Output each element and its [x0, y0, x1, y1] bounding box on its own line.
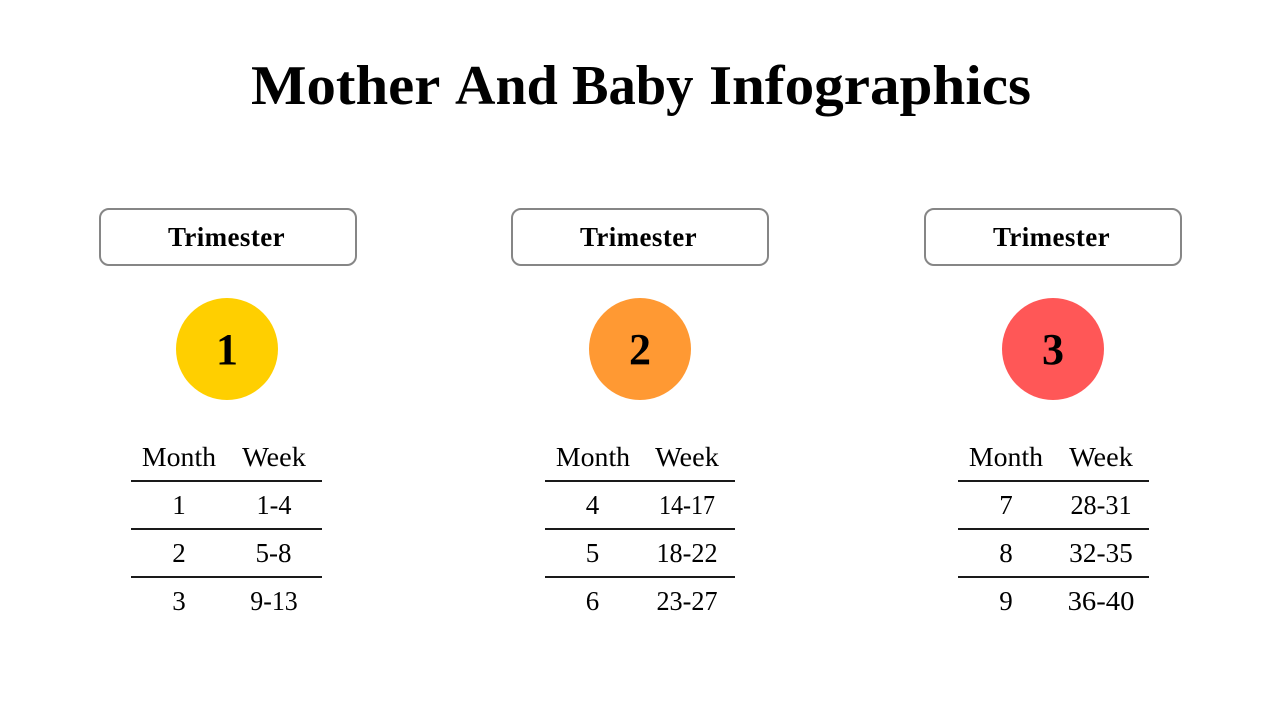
table: trimester 3 months and weeks: 32-35 — [1069, 538, 1132, 568]
title: Infographics — [709, 55, 1031, 117]
table: trimester 1 months and weeks: 3 — [172, 586, 186, 616]
table: trimester 3 months and weeks: 8 — [999, 538, 1013, 568]
table: trimester 2 months and weeks: Week — [655, 442, 719, 472]
table: trimester 3 months and weeks: 9 — [999, 586, 1013, 616]
table: trimester 3 months and weeks: 36-40 — [1067, 586, 1134, 616]
table: trimester 1 months and weeks: 5-8 — [256, 538, 292, 568]
table: trimester 3 months and weeks: Week — [1069, 442, 1132, 472]
table: trimester 3 months and weeks: 28-31 — [1070, 490, 1131, 520]
table: trimester 2 months and weeks: Month — [555, 442, 630, 472]
table: trimester 2 months and weeks: 4 — [586, 490, 599, 520]
table: trimester 1 months and weeks: Week — [242, 442, 305, 472]
title: Mother — [251, 55, 440, 117]
table: trimester 1 months and weeks: 2 — [172, 538, 186, 568]
table: trimester 1 months and weeks: 1 — [172, 490, 186, 520]
table: trimester 2 months and weeks — [545, 442, 735, 616]
table: trimester 2 months and weeks: 6 — [586, 586, 599, 616]
table: trimester 1 months and weeks: 1-4 — [256, 490, 291, 520]
table: trimester 1 months and weeks — [131, 442, 322, 616]
trimester 2 label: Trimester — [580, 222, 697, 252]
trimester 3 label: Trimester — [993, 222, 1110, 252]
table: trimester 2 months and weeks: 14-17 — [659, 490, 715, 520]
icon: number 2 circle — [589, 298, 691, 400]
table: trimester 2 months and weeks: 23-27 — [656, 586, 718, 616]
trimester 2 label — [511, 208, 769, 266]
table: trimester 3 months and weeks: Month — [969, 442, 1043, 472]
icon: number 2 circle: 2 — [629, 325, 651, 374]
table: trimester 1 months and weeks: 9-13 — [250, 586, 297, 616]
title: Baby — [572, 55, 694, 117]
trimester 1 label: Trimester — [168, 222, 285, 252]
table: trimester 2 months and weeks: 18-22 — [656, 538, 718, 568]
table: trimester 3 months and weeks — [958, 442, 1149, 616]
title — [251, 55, 1031, 117]
table: trimester 2 months and weeks: 5 — [586, 538, 599, 568]
icon: number 3 circle — [1002, 298, 1104, 400]
trimester 1 label — [99, 208, 357, 266]
table: trimester 3 months and weeks: 7 — [999, 490, 1013, 520]
icon: number 1 circle: 1 — [216, 325, 238, 374]
trimester 3 label — [924, 208, 1182, 266]
icon: number 1 circle — [176, 298, 278, 400]
title: And — [455, 55, 558, 117]
table: trimester 1 months and weeks: Month — [142, 442, 216, 472]
icon: number 3 circle: 3 — [1042, 325, 1064, 374]
